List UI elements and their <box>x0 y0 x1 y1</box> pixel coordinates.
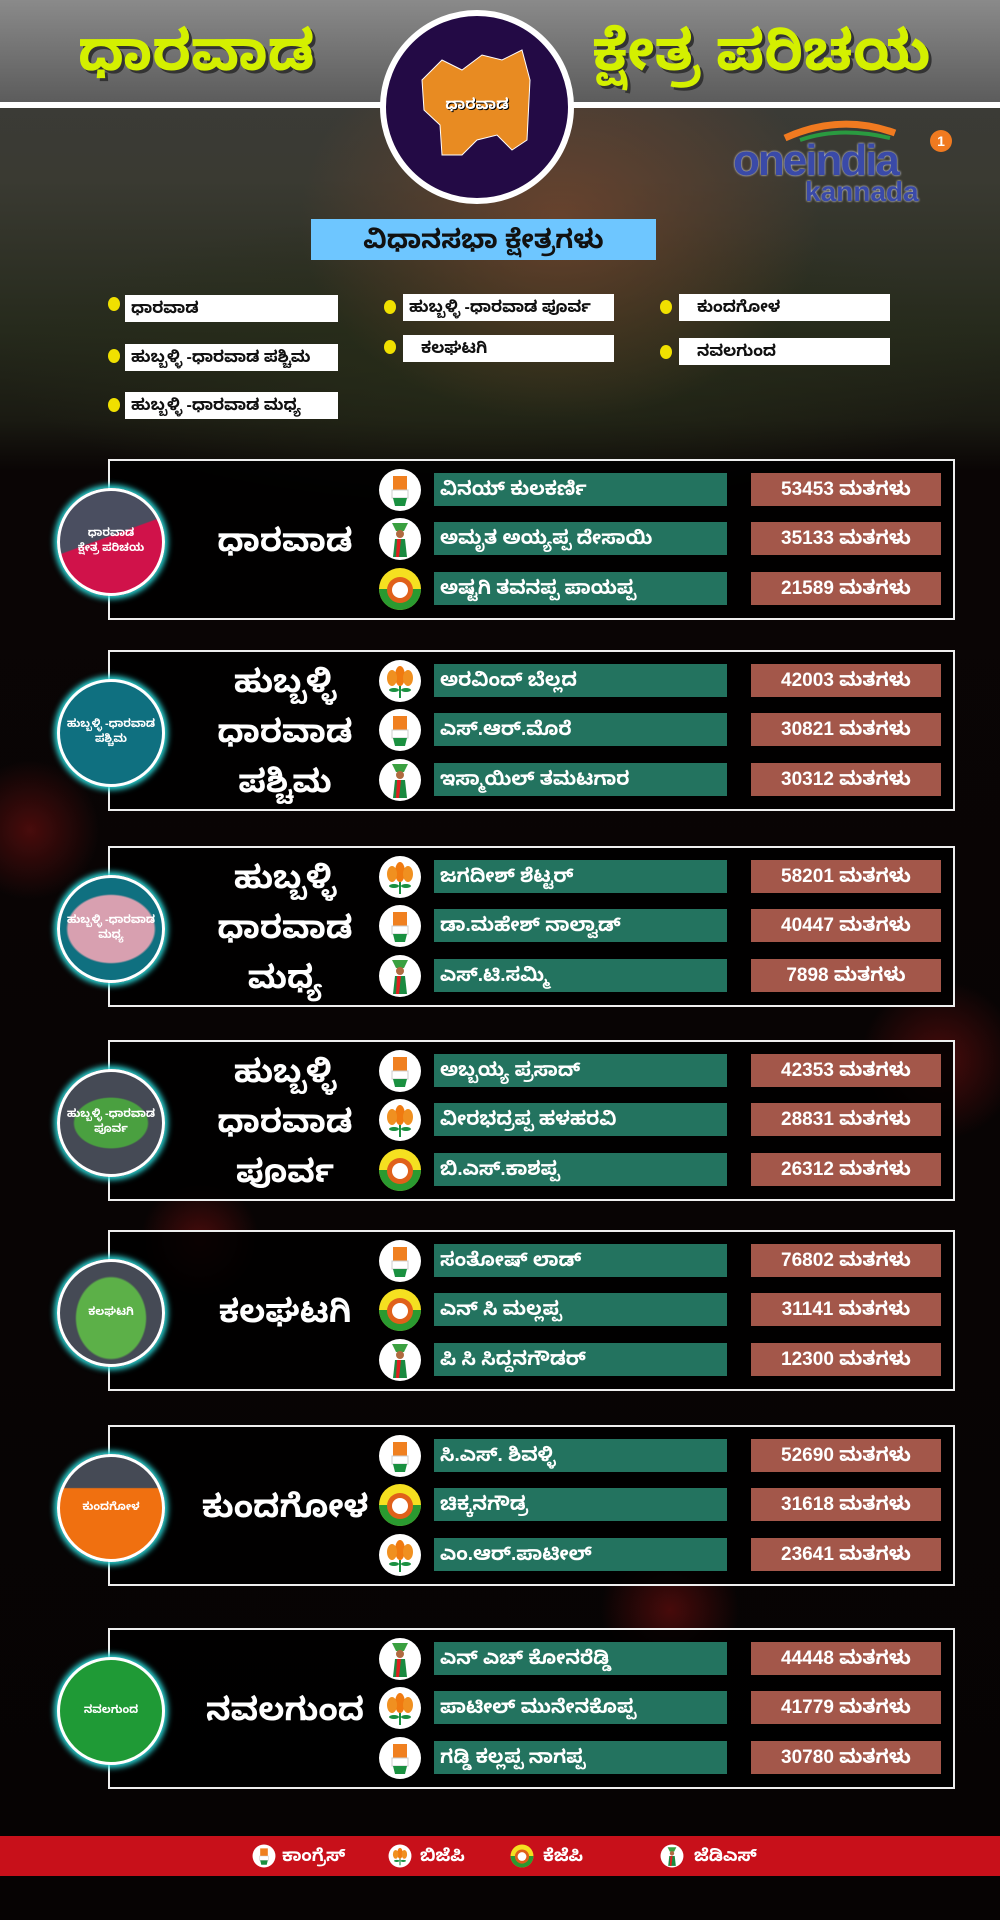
panel: Hubli-Dharwad Central: ಹುಬ್ಬಳ್ಳಿ -ಧಾರವಾಡ <box>67 914 155 926</box>
footer legend: ಕೆಜೆಪಿ <box>543 1846 583 1865</box>
panel: Dharwad: ಕ್ಷೇತ್ರ ಪರಿಚಯ <box>78 542 144 554</box>
panel: Kalghatgi: 76802 ಮತಗಳು <box>781 1250 911 1271</box>
footer legend: ಬಿಜೆಪಿ <box>420 1846 465 1865</box>
section heading: ವಿಧಾನಸಭಾ ಕ್ಷೇತ್ರಗಳು <box>363 224 604 254</box>
panel: Kundgol: ಕುಂದಗೋಳ <box>82 1500 140 1512</box>
panel: Kalghatgi: ಕಲಘಟಗಿ <box>88 1306 134 1318</box>
panel: Hubli-Dharwad Central <box>108 846 955 1007</box>
panel: Dharwad: 35133 ಮತಗಳು <box>781 528 911 549</box>
panel: Hubli-Dharwad East: ಪೂರ್ವ <box>94 1123 128 1135</box>
panel: Navalgund: ನವಲಗುಂದ <box>206 1690 364 1726</box>
panel: Hubli-Dharwad East: ಬಿ.ಎಸ್.ಕಾಶಪ್ಪ <box>440 1159 560 1180</box>
panel: Hubli-Dharwad West: ಇಸ್ಮಾಯಿಲ್ ತಮಟಗಾರ <box>440 769 629 790</box>
panel: Navalgund: 41779 ಮತಗಳು <box>781 1697 911 1718</box>
panel: Hubli-Dharwad West <box>108 650 955 811</box>
panel: Dharwad: ಅಷ್ಟಗಿ ತವನಪ್ಪ ಪಾಯಪ್ಪ <box>440 578 636 599</box>
panel: Navalgund: 30780 ಮತಗಳು <box>781 1747 911 1768</box>
panel: Hubli-Dharwad Central: ಮಧ್ಯ <box>248 958 322 994</box>
panel: Hubli-Dharwad East: 26312 ಮತಗಳು <box>781 1159 911 1180</box>
panel: Hubli-Dharwad Central: ಮಧ್ಯ <box>98 929 124 941</box>
panel: Kalghatgi: 31141 ಮತಗಳು <box>782 1299 910 1320</box>
panel: Kundgol: ಎಂ.ಆರ್.ಪಾಟೀಲ್ <box>440 1544 592 1565</box>
panel: Kundgol: 23641 ಮತಗಳು <box>781 1544 911 1565</box>
panel: Dharwad: 53453 ಮತಗಳು <box>781 479 911 500</box>
panel: Kundgol: 31618 ಮತಗಳು <box>781 1494 911 1515</box>
panel: Kundgol: ಚಿಕ್ಕನಗೌಡ್ರ <box>440 1494 528 1515</box>
panel: Hubli-Dharwad Central: ಜಗದೀಶ್ ಶೆಟ್ಟರ್ <box>440 866 573 887</box>
panel: Hubli-Dharwad East: ವೀರಭದ್ರಪ್ಪ ಹಳಹರವಿ <box>440 1109 616 1130</box>
panel: Hubli-Dharwad East: ಹುಬ್ಬಳ್ಳಿ -ಧಾರವಾಡ <box>67 1108 155 1120</box>
panel: Dharwad: ಅಮೃತ ಅಯ್ಯಪ್ಪ ದೇಸಾಯಿ <box>440 528 652 549</box>
panel: Hubli-Dharwad West: ಅರವಿಂದ್ ಬೆಲ್ಲದ <box>440 670 577 691</box>
panel: Navalgund <box>108 1628 955 1789</box>
panel: Hubli-Dharwad East: ಪೂರ್ವ <box>236 1152 334 1188</box>
panel: Dharwad: ಧಾರವಾಡ <box>88 527 134 539</box>
footer legend <box>0 1836 1000 1876</box>
constituency list: ಹುಬ್ಬಳ್ಳಿ -ಧಾರವಾಡ ಪೂರ್ವ <box>409 299 591 316</box>
title left: ಧಾರವಾಡ <box>78 19 315 82</box>
panel: Hubli-Dharwad East: ಅಬ್ಬಯ್ಯ ಪ್ರಸಾದ್ <box>440 1060 580 1081</box>
panel: Hubli-Dharwad West: ಎಸ್.ಆರ್.ಮೊರೆ <box>440 719 572 740</box>
panel: Dharwad: ಧಾರವಾಡ <box>217 522 353 558</box>
constituency list: ಕಲಘಟಗಿ <box>421 340 487 357</box>
panel: Hubli-Dharwad East <box>108 1040 955 1201</box>
panel: Kalghatgi: ಪಿ ಸಿ ಸಿದ್ದನಗೌಡರ್ <box>440 1349 586 1370</box>
panel: Navalgund: ಪಾಟೀಲ್ ಮುನೇನಕೊಪ್ಪ <box>440 1697 636 1718</box>
panel: Hubli-Dharwad East: 28831 ಮತಗಳು <box>781 1109 911 1130</box>
panel: Navalgund: ನವಲಗುಂದ <box>84 1704 138 1716</box>
constituency list: ಹುಬ್ಬಳ್ಳಿ -ಧಾರವಾಡ ಪಶ್ಚಿಮ <box>131 349 311 366</box>
panel: Hubli-Dharwad Central: 7898 ಮತಗಳು <box>786 965 906 986</box>
panel: Navalgund: 44448 ಮತಗಳು <box>781 1648 911 1669</box>
panel: Dharwad <box>108 459 955 620</box>
footer legend: ಜೆಡಿಎಸ್ <box>694 1846 757 1865</box>
panel: Dharwad: ವಿನಯ್ ಕುಲಕರ್ಣಿ <box>440 479 587 500</box>
header band <box>0 0 1000 102</box>
logo: oneindia kannada <box>733 120 952 207</box>
panel: Hubli-Dharwad East: ಧಾರವಾಡ <box>217 1102 353 1138</box>
panel: Kalghatgi: 12300 ಮತಗಳು <box>781 1349 911 1370</box>
panel: Hubli-Dharwad Central: ಡಾ.ಮಹೇಶ್ ನಾಲ್ವಾಡ್ <box>440 915 621 936</box>
constituency list: ಹುಬ್ಬಳ್ಳಿ -ಧಾರವಾಡ ಮಧ್ಯ <box>131 397 301 414</box>
logo: oneindia kannada: kannada <box>805 176 919 207</box>
panel: Kalghatgi: ಕಲಘಟಗಿ <box>219 1292 351 1328</box>
panel: Kalghatgi <box>108 1230 955 1391</box>
panel: Hubli-Dharwad Central: ಎಸ್.ಟಿ.ಸಮ್ಮಿ <box>440 965 549 986</box>
district map circle <box>380 10 574 204</box>
constituency list <box>108 294 890 419</box>
panel: Hubli-Dharwad West: 30821 ಮತಗಳು <box>781 719 911 740</box>
panel: Hubli-Dharwad Central: 58201 ಮತಗಳು <box>781 866 911 887</box>
constituency list: ನವಲಗುಂದ <box>697 343 776 360</box>
panel: Hubli-Dharwad West: ಪಶ್ಚಿಮ <box>238 762 332 798</box>
panel: Hubli-Dharwad East: ಹುಬ್ಬಳ್ಳಿ <box>234 1052 336 1088</box>
constituency list: ಧಾರವಾಡ <box>131 300 199 317</box>
panel: Kundgol: ಸಿ.ಎಸ್. ಶಿವಳ್ಳಿ <box>440 1445 556 1466</box>
logo: oneindia kannada: oneindia <box>733 136 898 185</box>
panel: Hubli-Dharwad Central: ಹುಬ್ಬಳ್ಳಿ <box>234 858 336 894</box>
panel: Hubli-Dharwad West: 42003 ಮತಗಳು <box>781 670 911 691</box>
constituency list: ಕುಂದಗೋಳ <box>697 299 780 316</box>
panel: Hubli-Dharwad Central: 40447 ಮತಗಳು <box>781 915 911 936</box>
logo: oneindia kannada: 1 <box>937 133 945 149</box>
panel: Navalgund: ಗಡ್ಡಿ ಕಲ್ಲಪ್ಪ ನಾಗಪ್ಪ <box>440 1747 585 1768</box>
panel: Hubli-Dharwad Central: ಧಾರವಾಡ <box>217 908 353 944</box>
panel: Kalghatgi: ಸಂತೋಷ್ ಲಾಡ್ <box>440 1250 581 1271</box>
panel: Hubli-Dharwad East: 42353 ಮತಗಳು <box>781 1060 911 1081</box>
panel: Navalgund: ಎನ್ ಎಚ್ ಕೋನರೆಡ್ಡಿ <box>440 1648 610 1669</box>
district map circle: ಧಾರವಾಡ <box>445 96 509 113</box>
panel: Hubli-Dharwad West: ಧಾರವಾಡ <box>217 712 353 748</box>
panel: Hubli-Dharwad West: 30312 ಮತಗಳು <box>781 769 911 790</box>
panel: Kalghatgi: ಎನ್ ಸಿ ಮಲ್ಲಪ್ಪ <box>440 1299 562 1320</box>
panel: Kundgol <box>108 1425 955 1586</box>
section heading <box>311 219 656 260</box>
panel: Kundgol: ಕುಂದಗೋಳ <box>202 1488 368 1524</box>
title right: ಕ್ಷೇತ್ರ ಪರಿಚಯ <box>592 19 931 82</box>
panel: Dharwad: 21589 ಮತಗಳು <box>781 578 911 599</box>
panel: Hubli-Dharwad West: ಹುಬ್ಬಳ್ಳಿ <box>234 662 336 698</box>
panel: Kundgol: 52690 ಮತಗಳು <box>781 1445 911 1466</box>
panel: Hubli-Dharwad West: ಹುಬ್ಬಳ್ಳಿ -ಧಾರವಾಡ <box>67 718 155 730</box>
panel: Hubli-Dharwad West: ಪಶ್ಚಿಮ <box>95 733 127 745</box>
footer legend: ಕಾಂಗ್ರೆಸ್ <box>282 1846 345 1865</box>
